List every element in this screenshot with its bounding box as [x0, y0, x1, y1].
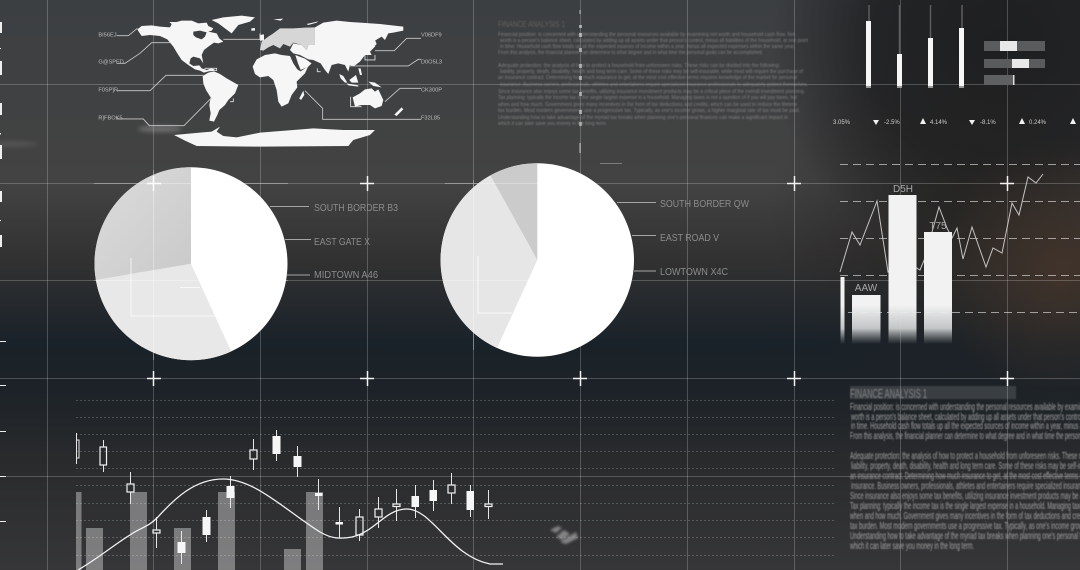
bottom sine curve	[78, 479, 503, 570]
text block: top finance analysis: an insurance contract. Determining how much insurance to get, at the most cost effective terms requires knowledge of the market for personal	[498, 75, 797, 81]
map labels: F0SP]R	[98, 88, 118, 94]
map continents	[137, 16, 403, 147]
market change values: 0.24%	[1029, 120, 1047, 126]
pie 2 labels: SOUTH BORDER QW	[660, 198, 749, 210]
chart bar labels: T75	[929, 221, 947, 232]
text block: top finance analysis: liability, property, death, disability, health and long term care. Some of these risks may be self-insurable, while most will require the purchase of	[500, 69, 804, 75]
text block: top finance analysis: From this analysis, the financial planner can determine to what degree and in what time the personal goals can be accomplished.	[498, 50, 763, 56]
centre vertical glitch line	[579, 10, 622, 164]
map highlighted Europe	[260, 27, 315, 51]
pie 2 labels: EAST ROAD V	[660, 232, 719, 244]
market change values: 3.05%	[833, 120, 851, 126]
world map	[98, 16, 442, 147]
text block: top finance analysis: Since insurance also enjoys some tax benefits, utilizing insurance investment products may be a critical piece of the overall investment planning.	[498, 89, 805, 95]
text block: finance analysis panel	[849, 386, 1080, 552]
text block: top finance analysis: FINANCE ANALYSIS 1	[498, 20, 565, 29]
bottom chart dashed guides	[76, 400, 835, 556]
bottom candlesticks	[76, 430, 492, 564]
trend line	[840, 174, 1043, 272]
pie 1 labels: EAST GATE X	[314, 236, 370, 248]
pie 2 labels: LOWTOWN X4C	[660, 266, 728, 278]
chart dashed guides	[840, 164, 1080, 312]
map leader lines	[117, 28, 421, 126]
left edge ticks	[0, 22, 6, 522]
mini bars	[866, 21, 964, 86]
candlestick bars mini chart	[866, 5, 964, 88]
pie 1 labels	[270, 202, 398, 281]
map labels: R]FBOK5	[98, 116, 123, 122]
text block: top finance analysis: tax burden. Most modern governments use a progressive tax. Typically, as one's income grows, a higher marginal rate of tax must be paid.	[498, 108, 800, 114]
pie chart 1	[94, 167, 288, 360]
map labels	[98, 32, 442, 122]
bottom volume bars	[76, 492, 323, 570]
map labels: F32L85	[421, 116, 440, 122]
blurred smudge	[550, 526, 578, 544]
chart bar labels: D5H	[893, 184, 913, 195]
chart bar labels	[855, 184, 947, 294]
market change values: -2.5%	[884, 120, 900, 126]
text block: finance analysis panel: which it can later save you money in the long term.	[849, 541, 974, 552]
pie 1 labels: MIDTOWN A46	[314, 269, 378, 281]
text block: top finance analysis: in time. Household cash flow totals up all the expected sources of income within a year, minus all expected expenses within the same year.	[500, 44, 795, 50]
panel title band	[850, 386, 1016, 399]
crosshairs	[147, 176, 1014, 386]
map labels: D0O5L3	[421, 60, 442, 66]
right chart with bars and line	[840, 164, 1080, 344]
text block: top finance analysis: which it can later save you money in the long term.	[498, 121, 607, 127]
market change values: 4.14%	[930, 120, 948, 126]
text block: top finance analysis: when and how much. Government gives many incentives in the form of tax deductions and credits, which can be used to reduce the lifetime	[498, 102, 797, 108]
map labels: BI56EJ	[98, 32, 117, 38]
pie chart 2	[440, 163, 634, 357]
map labels: CK300P	[421, 88, 442, 94]
map labels: V06DF9	[421, 32, 442, 38]
text block: top finance analysis: Financial position: is concerned with understanding the personal resources available by examining net worth and household cash flow. Net	[498, 32, 796, 38]
chart bars	[840, 195, 952, 344]
market change values	[833, 118, 1076, 126]
pie 2 labels	[617, 198, 749, 278]
chart bar labels: AAW	[855, 283, 878, 294]
text block: top finance analysis: Adequate protection: the analysis of how to protect a household from unforeseen risks. These risks can be divided into the following:	[498, 63, 780, 69]
text block: top finance analysis: Tax planning: typically the income tax is the single largest expense in a household. Managing taxes is not a question of if you will pay taxes, but	[498, 95, 798, 101]
pie 1 labels: SOUTH BORDER B3	[314, 202, 398, 214]
text block: finance analysis panel: FINANCE ANALYSIS 1	[850, 386, 927, 401]
text block: top finance analysis: Understanding how to take advantage of the myriad tax breaks when planning one's personal finances can make a significant impact in	[498, 115, 788, 121]
market change values: -8.1%	[980, 120, 996, 126]
text block: top finance analysis	[498, 20, 809, 127]
horizontal range bars	[984, 41, 1045, 85]
map labels: G@SPED	[98, 60, 124, 66]
text block: top finance analysis: insurance. Business owners, professionals, athletes and entertainers require specialized insurance professionals to adequately protect themselves.	[500, 82, 808, 88]
text block: top finance analysis: worth is a person's balance sheet, calculated by adding up all assets under that person's control, minus all liabilities of the household, at one point	[500, 38, 809, 44]
